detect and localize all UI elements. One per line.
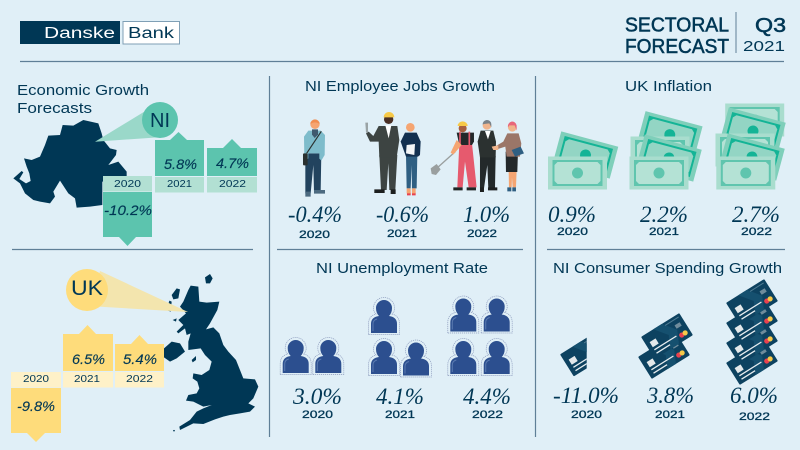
stat: inflation 2020: [548, 202, 596, 238]
bar: UK 2020: [11, 372, 61, 442]
stat: unemployment 2020: 3.0%: [292, 384, 342, 409]
stat: inflation 2022: 2.7%: [732, 202, 780, 227]
icon: partial credit card 2020: [560, 338, 587, 376]
icon: people 2022: [448, 296, 512, 376]
bar: UK 2021: 6.5%: [72, 351, 105, 367]
heading: UK Inflation: UK Inflation: [625, 78, 712, 95]
icon: banknotes 2022: [716, 104, 786, 190]
stat: jobs 2022: [463, 202, 510, 240]
stat: unemployment 2021: 2021: [385, 409, 415, 421]
bar: NI 2021: 2021: [167, 179, 192, 190]
map: Northern Ireland: [13, 120, 127, 208]
stat: unemployment 2020: 2020: [302, 409, 333, 421]
icon: people 2020: [280, 338, 344, 374]
stat: unemployment 2022: [463, 384, 511, 421]
icon: construction worker and office woman: [365, 112, 421, 195]
title: Sectoral Forecast: SECTORAL: [625, 14, 729, 36]
heading: Economic Growth Forecasts: Forecasts: [17, 100, 92, 117]
title: Sectoral Forecast: FORECAST: [625, 36, 729, 58]
stat: spending 2022: 2022: [739, 411, 770, 423]
logo: Danske Bank: Danske: [44, 25, 115, 42]
bar: NI 2020: 2020: [114, 179, 142, 190]
bar: NI 2020: -10.2%: [104, 202, 152, 218]
stat: inflation 2022: [732, 202, 780, 238]
stat: jobs 2020: -0.4%: [288, 202, 342, 227]
bar: UK 2021: 2021: [74, 374, 101, 385]
panel: NI economic growth forecasts: [13, 82, 257, 246]
period: Q3 2021: 2021: [743, 38, 785, 55]
panel: NI unemployment rate: [280, 260, 512, 421]
icon: banknotes 2020: [548, 131, 618, 190]
UK callout: UK: [71, 277, 103, 300]
stat: unemployment 2020: [292, 384, 342, 421]
title: Sectoral Forecast: [625, 14, 729, 58]
bar: NI 2022: 4.7%: [216, 155, 249, 171]
icon: person with bag: [303, 119, 325, 197]
stat: inflation 2021: 2021: [649, 226, 679, 238]
stat: inflation 2022: 2022: [741, 226, 772, 238]
icon: people 2021: [368, 298, 432, 377]
heading: NI Employee Jobs Growth: NI Employee Jobs Growth: [305, 78, 495, 95]
NI callout: NI: [150, 110, 170, 132]
stat: jobs 2021: [376, 202, 429, 240]
UK callout: [66, 269, 188, 312]
heading: Economic Growth Forecasts: Economic Growth: [17, 82, 149, 99]
logo: Danske Bank: [20, 21, 180, 44]
bar: UK 2021: [63, 325, 113, 388]
logo: Danske Bank: Bank: [128, 25, 174, 42]
stat: inflation 2021: 2.2%: [640, 202, 688, 227]
panel: UK economic growth forecasts: [11, 269, 258, 442]
stat: spending 2021: 3.8%: [646, 383, 694, 408]
stat: spending 2021: [646, 383, 694, 421]
stat: unemployment 2021: [376, 384, 424, 421]
bar: UK 2022: 5.4%: [123, 351, 157, 367]
stat: spending 2021: 2021: [655, 409, 685, 421]
bar: NI 2022: [207, 139, 257, 192]
stat: unemployment 2022: 4.4%: [463, 384, 511, 409]
heading: NI Unemployment Rate: NI Unemployment Rate: [316, 260, 488, 277]
stat: inflation 2020: 0.9%: [548, 202, 596, 227]
heading: NI Consumer Spending Growth: NI Consumer Spending Growth: [553, 260, 782, 277]
bar: NI 2020: [103, 176, 152, 246]
bar: UK 2022: 2022: [126, 374, 154, 385]
header: [20, 12, 786, 58]
bar: UK 2022: [115, 335, 164, 388]
map: United Kingdom: [164, 274, 258, 431]
stat: spending 2020: [553, 383, 619, 421]
bar: UK 2020: 2020: [23, 374, 50, 385]
stat: jobs 2020: [288, 202, 342, 241]
bar: UK 2020: -9.8%: [17, 398, 55, 414]
icon: worker with shovel, businessman and woman: [431, 120, 524, 192]
stat: spending 2022: [730, 383, 778, 423]
stat: jobs 2021: -0.6%: [376, 202, 429, 227]
stat: unemployment 2021: 4.1%: [376, 384, 424, 409]
NI callout: [95, 102, 178, 142]
icon: credit cards 2022: [726, 279, 778, 385]
icon: banknotes 2021: [630, 111, 703, 190]
stat: jobs 2022: 1.0%: [463, 202, 510, 227]
period: Q3 2021: [743, 15, 786, 55]
panel: NI consumer spending growth: [553, 260, 782, 423]
stat: spending 2020: -11.0%: [553, 383, 619, 408]
period: Q3 2021: Q3: [755, 15, 786, 37]
stat: jobs 2021: 2021: [387, 228, 417, 240]
icon: credit cards 2021: [638, 313, 693, 379]
bar: NI 2022: 2022: [219, 179, 247, 190]
stat: inflation 2020: 2020: [557, 226, 588, 238]
bar: NI 2021: [155, 132, 204, 192]
stat: inflation 2021: [640, 202, 688, 238]
stat: unemployment 2022: 2022: [472, 409, 503, 421]
panel: UK inflation: [548, 78, 786, 238]
stat: jobs 2022: 2022: [467, 228, 497, 240]
stat: spending 2022: 6.0%: [730, 383, 778, 408]
stat: spending 2020: 2020: [571, 409, 602, 421]
bar: NI 2021: 5.8%: [164, 156, 197, 172]
panel: NI employee jobs growth: [288, 78, 524, 241]
stat: jobs 2020: 2020: [299, 229, 330, 241]
